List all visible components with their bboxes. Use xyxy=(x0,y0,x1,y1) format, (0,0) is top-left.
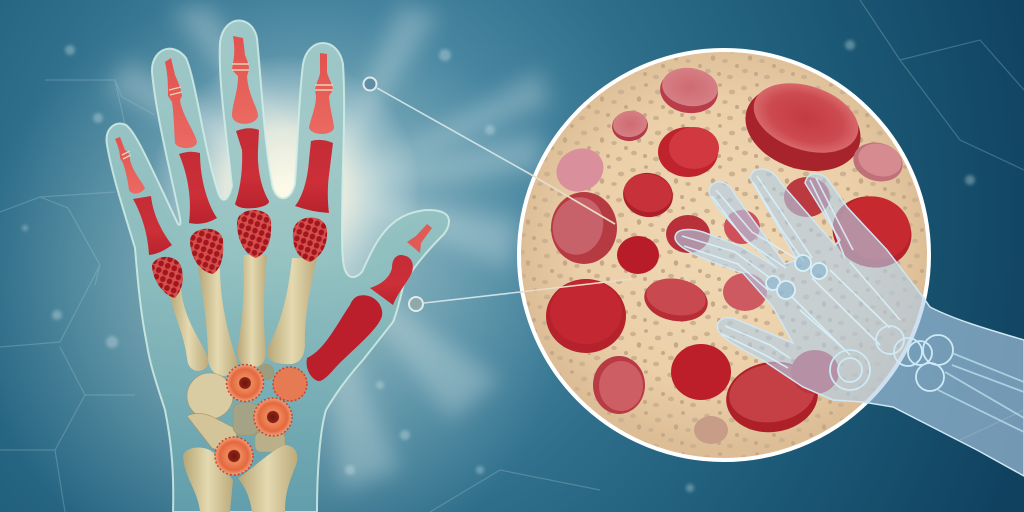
inflamed joint flowers xyxy=(215,364,307,475)
thumb bones xyxy=(307,224,432,381)
magnified circle xyxy=(519,50,929,460)
index finger bones xyxy=(267,53,334,364)
x-ray wrist rings xyxy=(830,326,953,391)
leader line: thumb to circle xyxy=(409,279,632,311)
carpal bones xyxy=(187,364,285,454)
x-ray finger bones xyxy=(682,176,900,368)
x-ray joints xyxy=(766,255,827,299)
ring finger bones xyxy=(165,58,237,376)
x-ray skin xyxy=(675,169,1024,476)
x-ray forearm bones xyxy=(938,353,1024,432)
middle finger bones xyxy=(232,36,271,367)
central glow xyxy=(150,55,420,325)
hand silhouette xyxy=(107,20,449,512)
blood cells xyxy=(546,64,922,444)
leader line: fingers to circle xyxy=(364,78,615,224)
x-ray hand xyxy=(675,169,1024,476)
light rays xyxy=(105,5,550,490)
little finger bones xyxy=(115,137,208,371)
forearm bones xyxy=(183,445,297,512)
hand illustration xyxy=(107,20,449,512)
pale joint rings on finger tips xyxy=(122,64,333,159)
